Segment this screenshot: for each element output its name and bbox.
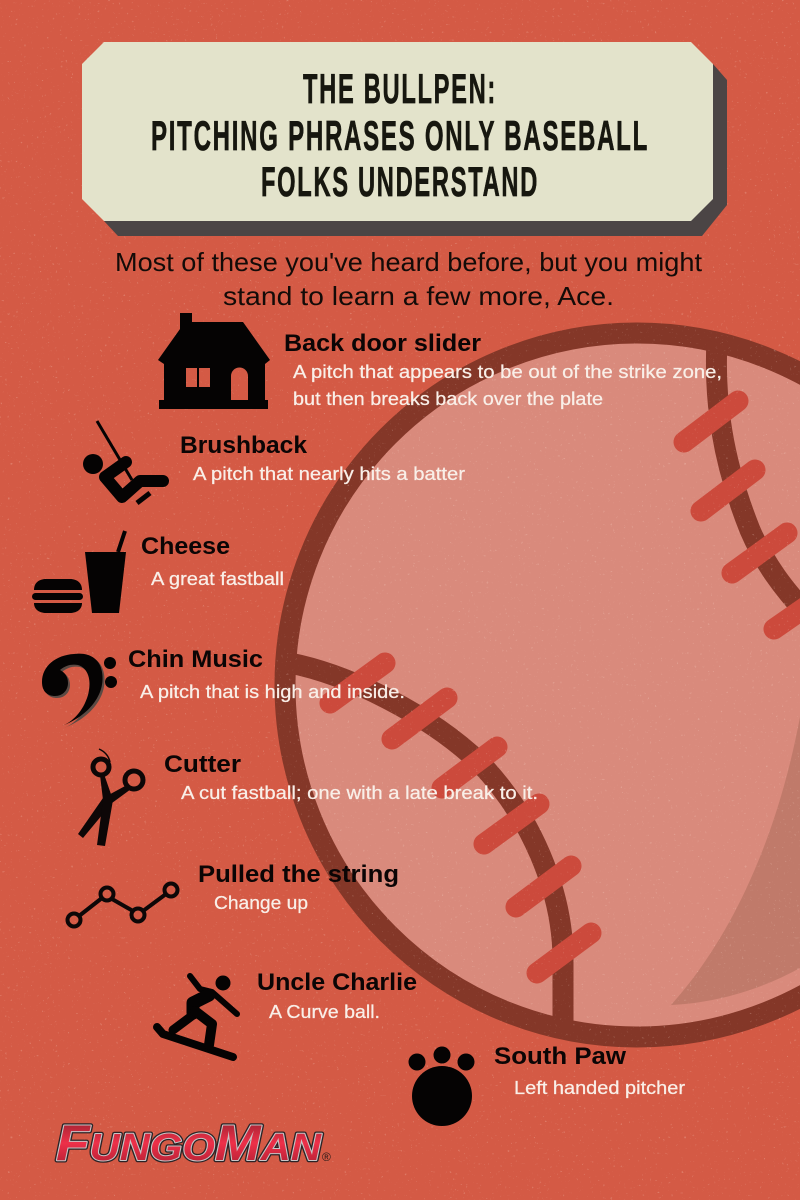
term: Chin Music: A pitch that is high and inside. [140, 682, 405, 702]
ball shadow [671, 717, 800, 1005]
baseball [285, 333, 800, 1037]
term: South Paw [494, 1043, 685, 1098]
term: Brushback: Brushback [180, 432, 308, 459]
term: Back door slider: Back door slider [284, 330, 481, 357]
term: Cutter: Cutter [164, 751, 241, 778]
term: South Paw: Left handed pitcher [514, 1078, 685, 1098]
logo: FungoMan: FUNGOMAN [56, 1115, 323, 1171]
icon: scissors [78, 749, 143, 846]
logo: FungoMan: FUNGOMAN [56, 1115, 323, 1171]
term: Pulled the string [198, 861, 399, 913]
term: Back door slider: but then breaks back over the plate [293, 389, 603, 409]
banner plate [82, 42, 713, 221]
lower stitches [330, 663, 591, 973]
term: Uncle Charlie [257, 969, 417, 1022]
term: Brushback: A pitch that nearly hits a batter [193, 464, 465, 484]
title text [151, 65, 649, 205]
term: Uncle Charlie: Uncle Charlie [257, 969, 417, 996]
icon: paw [408, 1046, 474, 1126]
term: Brushback [180, 432, 465, 484]
subtitle: stand to learn a few more, Ace. [223, 281, 614, 311]
title text: THE BULLPEN: [303, 65, 497, 112]
term: Cheese: Cheese [141, 533, 230, 560]
term: Cheese [141, 533, 284, 589]
icon: snowboarder [157, 976, 237, 1057]
term: Pulled the string: Change up [214, 893, 308, 913]
term: Cutter: A cut fastball; one with a late break to it. [181, 783, 538, 803]
term: Pulled the string: Pulled the string [198, 861, 399, 888]
ball body [285, 333, 800, 1037]
upper stitches [684, 401, 800, 629]
upper seam [716, 340, 800, 612]
term: South Paw: South Paw [494, 1043, 626, 1070]
icon: line chart [68, 884, 178, 926]
term: Back door slider: A pitch that appears to be out of the strike zone, [293, 362, 722, 382]
logo: FungoMan: ® [322, 1150, 331, 1164]
icon: swing [83, 421, 163, 503]
term: Uncle Charlie: A Curve ball. [269, 1002, 380, 1022]
term: Back door slider [284, 330, 722, 409]
icon: house [158, 313, 270, 409]
lower seam [290, 663, 563, 1035]
term: Cheese: A great fastball [151, 569, 284, 589]
title banner [82, 42, 727, 236]
icon: burger and drink [32, 531, 126, 613]
title text: FOLKS UNDERSTAND [261, 158, 539, 205]
subtitle: Most of these you've heard before, but you might [115, 247, 703, 277]
icon: bass clef [42, 654, 117, 728]
banner shadow [104, 64, 727, 236]
term: Chin Music: Chin Music [128, 646, 263, 673]
term: Cutter [164, 751, 538, 803]
subtitle [115, 247, 703, 311]
term: Chin Music [128, 646, 405, 702]
